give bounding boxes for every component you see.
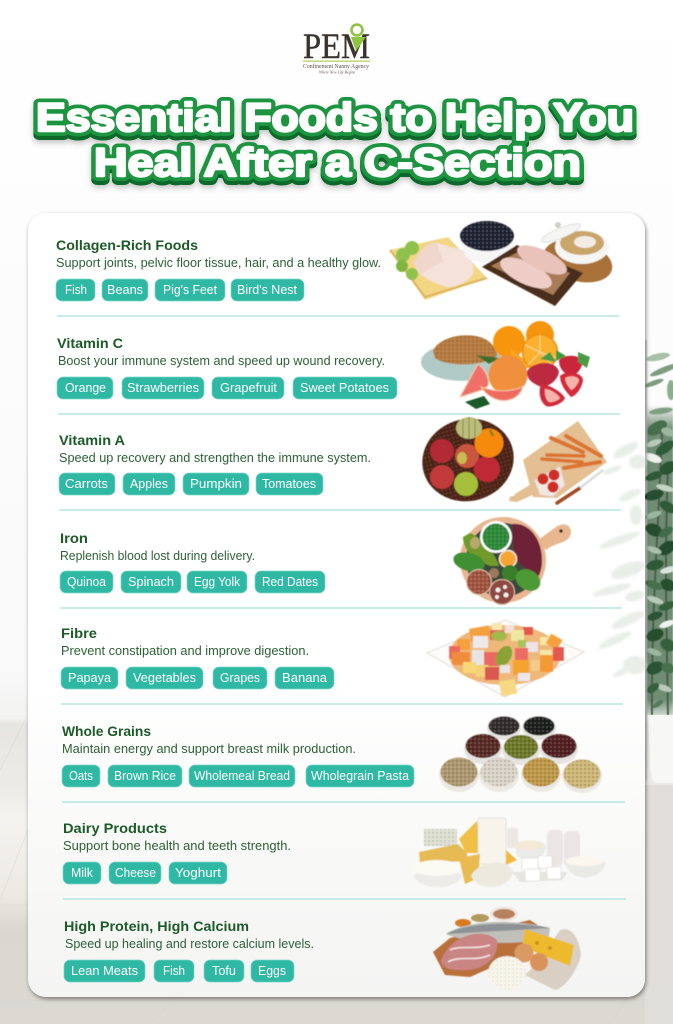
food tags [56, 279, 304, 301]
food tags: Orange [65, 381, 106, 395]
heading: Fibre [61, 625, 97, 641]
food image: dairy selection [413, 818, 606, 887]
food tags: Lean Meats [71, 964, 138, 978]
food tags [64, 960, 294, 982]
panel: High Protein, High Calcium [64, 906, 581, 990]
title: Essential Foods to Help You [36, 100, 634, 144]
food tags: Fish [163, 964, 185, 978]
description: Prevent constipation and improve digestion. [61, 644, 309, 658]
panel: Fibre [61, 620, 584, 697]
food image: fish, beans, pig's feet, bird's nest [390, 220, 617, 306]
food tags [59, 473, 323, 495]
heading: Iron [60, 530, 88, 546]
food tags: Yoghurt [175, 866, 222, 880]
food tags: Pig's Feet [163, 283, 218, 297]
food image: meat, fish, cheese, eggs [433, 906, 581, 990]
food image: fruit salad plate [427, 620, 584, 697]
panel: Whole Grains [62, 716, 602, 793]
food tags: Bird's Nest [237, 283, 298, 297]
background plant [643, 340, 673, 780]
food tags: Vegetables [133, 671, 196, 685]
title: Heal After a C-Section [94, 141, 581, 185]
panel: Collagen-Rich Foods [56, 220, 617, 306]
heading: High Protein, High Calcium [64, 918, 249, 934]
logo tagline: Confinement Nanny Agency [303, 63, 370, 70]
food tags: Pumpkin [190, 477, 242, 491]
food image: sweet potato, orange, grapefruit, strawberries [421, 321, 590, 409]
food tags: Banana [282, 671, 327, 685]
food tags [63, 862, 227, 884]
description: Speed up healing and restore calcium levels. [65, 937, 314, 951]
title [36, 96, 634, 189]
food tags: Papaya [68, 671, 111, 685]
food tags: Beans [107, 283, 143, 297]
food tags: Carrots [65, 477, 108, 491]
food tags: Tomatoes [262, 477, 316, 491]
food tags: Tofu [212, 964, 236, 978]
panel: Vitamin A [59, 408, 607, 512]
panel: Iron [60, 517, 571, 604]
food tags [61, 667, 334, 689]
food tags: Oats [69, 769, 93, 783]
food tags: Cheese [115, 866, 156, 880]
food tags: Brown Rice [114, 769, 176, 783]
logo: PEM [303, 24, 370, 74]
food image: bowls of grains [439, 716, 602, 793]
title: Heal After a C-Section [94, 145, 581, 189]
description: Support bone health and teeth strength. [63, 839, 291, 853]
food tags: Fish [65, 283, 87, 297]
description: Support joints, pelvic floor tissue, hair, and a healthy glow. [56, 256, 381, 270]
plant pot [648, 715, 673, 783]
food tags: Wholemeal Bread [194, 769, 290, 783]
food image: apples, pumpkin, carrots, tomatoes [413, 408, 607, 512]
food tags [60, 571, 325, 593]
heading: Vitamin A [59, 432, 125, 448]
food image: iron-rich platter [451, 517, 571, 604]
food tags: Milk [71, 866, 94, 880]
heading: Vitamin C [57, 335, 123, 351]
title: Heal After a C-Section [94, 141, 581, 185]
food tags: Red Dates [262, 575, 318, 589]
logo wordmark: PEM [303, 26, 370, 66]
title: Essential Foods to Help You [36, 96, 634, 140]
food tags [62, 765, 414, 787]
food tags: Sweet Potatoes [300, 381, 389, 395]
food tags: Apples [130, 477, 168, 491]
food tags: Grapes [220, 671, 260, 685]
food tags: Spinach [128, 575, 174, 589]
description: Replenish blood lost during delivery. [60, 549, 255, 563]
food tags: Grapefruit [220, 381, 278, 395]
food tags: Quinoa [67, 575, 106, 589]
description: Maintain energy and support breast milk production. [62, 742, 356, 756]
heading: Whole Grains [62, 723, 151, 739]
logo pin icon [351, 24, 366, 51]
panel: Vitamin C [57, 321, 590, 409]
logo: PEM: Where New Life Begins [319, 70, 355, 74]
title: Essential Foods to Help You [36, 96, 634, 140]
food tags: Strawberries [127, 381, 199, 395]
food tags: Eggs [258, 964, 286, 978]
description: Speed up recovery and strengthen the immune system. [59, 451, 371, 465]
description: Boost your immune system and speed up wound recovery. [58, 354, 385, 368]
food tags: Wholegrain Pasta [311, 769, 409, 783]
panel: Dairy Products [63, 818, 606, 887]
food tags [57, 377, 397, 399]
main white card [28, 213, 645, 997]
heading: Dairy Products [63, 820, 167, 836]
heading: Collagen-Rich Foods [56, 237, 198, 253]
food tags: Egg Yolk [194, 575, 241, 589]
ghost plant reflection in card [592, 439, 647, 679]
